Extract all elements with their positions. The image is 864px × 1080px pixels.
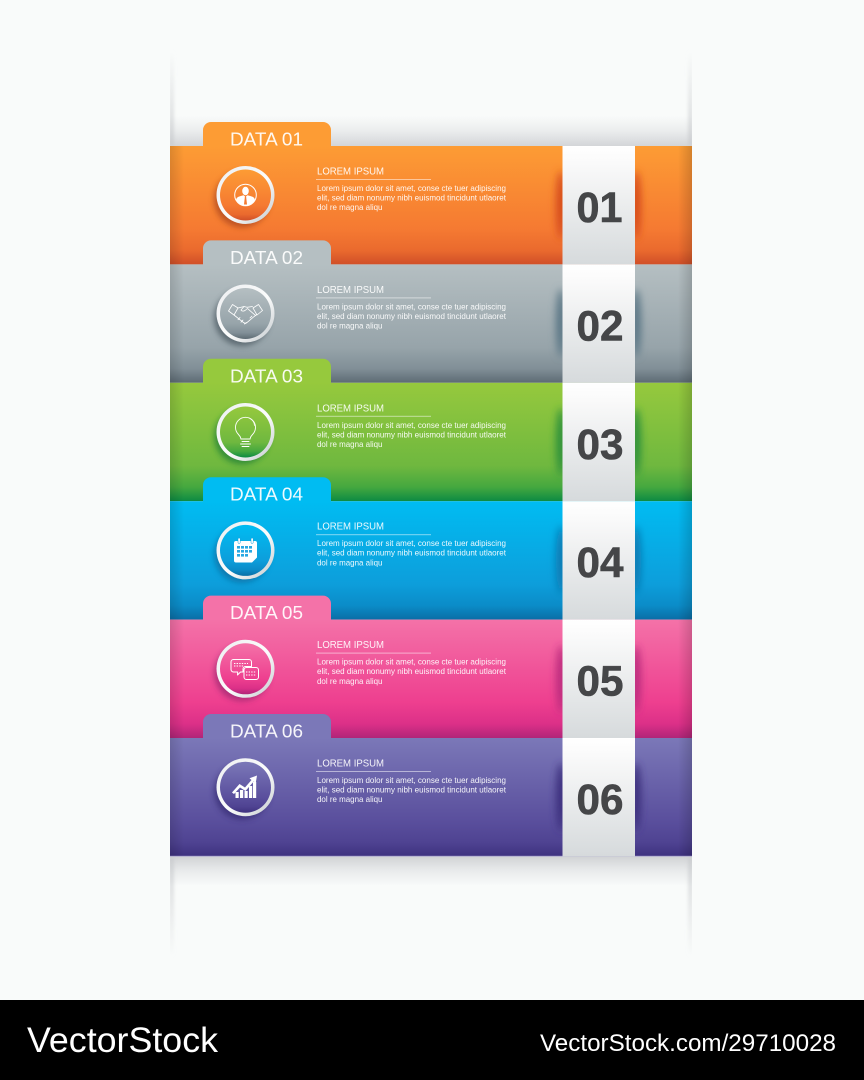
number 01 xyxy=(562,146,635,264)
number 04: 04 xyxy=(576,539,624,587)
strip shadow right xyxy=(631,645,641,713)
text block: lorem ipsum 01: elit, sed diam nonumy nibh euismod tincidunt utlaoret xyxy=(317,192,507,202)
text block: lorem ipsum 04: LOREM IPSUM xyxy=(317,522,384,533)
text block: lorem ipsum 01: Lorem ipsum dolor sit amet, conse cte tuer adipiscing xyxy=(317,183,506,193)
strip shadow right xyxy=(631,289,641,357)
strip shadows xyxy=(556,171,566,239)
number 02: 02 xyxy=(576,302,624,350)
text block: lorem ipsum 02: elit, sed diam nonumy nibh euismod tincidunt utlaoret xyxy=(317,311,507,321)
number 05 xyxy=(562,620,635,738)
strip shadows xyxy=(556,289,566,357)
number 03 xyxy=(562,383,635,501)
number 01: 01 xyxy=(576,184,622,232)
footer bar xyxy=(0,1000,864,1080)
panel: data 05 xyxy=(170,596,692,738)
text block: lorem ipsum 06: dol re magna aliqu xyxy=(317,794,383,804)
icon: light bulb badge xyxy=(214,403,274,464)
panel: data 02 xyxy=(170,240,692,383)
icon: calendar badge xyxy=(214,521,274,583)
number 04 xyxy=(562,501,635,620)
text block: lorem ipsum 01 xyxy=(316,166,507,212)
number 05: 05 xyxy=(576,658,624,706)
tab: data 01 xyxy=(203,122,331,150)
footer image id: VectorStock.com/29710028 xyxy=(540,1030,836,1057)
tab: data 06: DATA 06 xyxy=(230,720,303,742)
text block: lorem ipsum 02: LOREM IPSUM xyxy=(317,285,384,296)
back sheet shadow xyxy=(169,50,693,957)
tab: data 05 xyxy=(203,596,331,623)
tab: data 02: DATA 02 xyxy=(230,247,303,268)
strip shadow right xyxy=(631,408,641,476)
text block: lorem ipsum 05: Lorem ipsum dolor sit amet, conse cte tuer adipiscing xyxy=(317,657,506,667)
text block: lorem ipsum 04: elit, sed diam nonumy nibh euismod tincidunt utlaoret xyxy=(317,548,507,558)
tab: data 03 xyxy=(203,359,331,386)
strip shadows xyxy=(556,408,566,476)
text block: lorem ipsum 02: dol re magna aliqu xyxy=(317,321,383,331)
icon: businessman badge xyxy=(214,166,274,228)
text block: lorem ipsum 04: dol re magna aliqu xyxy=(317,557,383,567)
text block: lorem ipsum 06: Lorem ipsum dolor sit amet, conse cte tuer adipiscing xyxy=(317,775,506,785)
panel: data 01 xyxy=(170,122,692,264)
footer logo: VectorStock xyxy=(27,1021,219,1060)
text block: lorem ipsum 05: elit, sed diam nonumy nibh euismod tincidunt utlaoret xyxy=(317,666,507,676)
number 02 xyxy=(562,264,635,383)
number 03: 03 xyxy=(576,421,624,469)
text block: lorem ipsum 05 xyxy=(316,640,507,686)
panel: data 06 xyxy=(170,714,692,857)
tab: data 01: DATA 01 xyxy=(230,128,303,150)
number 06 xyxy=(562,738,635,856)
tab: data 05: DATA 05 xyxy=(230,602,303,623)
number strip xyxy=(562,146,635,856)
icon: growth chart badge xyxy=(214,758,274,820)
text block: lorem ipsum 01: LOREM IPSUM xyxy=(317,166,384,178)
icon: chat bubbles badge xyxy=(214,640,274,701)
panel: data 04 xyxy=(170,477,692,620)
text block: lorem ipsum 05: LOREM IPSUM xyxy=(317,640,384,651)
tab: data 04 xyxy=(203,477,331,505)
text block: lorem ipsum 01: dol re magna aliqu xyxy=(317,202,383,212)
text block: lorem ipsum 04 xyxy=(316,522,507,567)
text block: lorem ipsum 03: dol re magna aliqu xyxy=(317,439,383,449)
text block: lorem ipsum 04: Lorem ipsum dolor sit amet, conse cte tuer adipiscing xyxy=(317,538,506,548)
text block: lorem ipsum 03: LOREM IPSUM xyxy=(317,403,384,414)
tab: data 06 xyxy=(203,714,331,742)
strip shadows xyxy=(556,526,566,594)
tab: data 04: DATA 04 xyxy=(230,484,303,505)
strip shadow right xyxy=(631,171,641,239)
text block: lorem ipsum 02 xyxy=(316,285,507,331)
strip shadows xyxy=(556,763,566,831)
text block: lorem ipsum 03 xyxy=(316,403,507,449)
text block: lorem ipsum 03: Lorem ipsum dolor sit amet, conse cte tuer adipiscing xyxy=(317,420,506,430)
tab: data 02 xyxy=(203,240,331,268)
strip shadow right xyxy=(631,763,641,831)
text block: lorem ipsum 06 xyxy=(316,758,507,804)
text block: lorem ipsum 03: elit, sed diam nonumy nibh euismod tincidunt utlaoret xyxy=(317,429,507,439)
panel: data 03 xyxy=(170,359,692,501)
strip shadow right xyxy=(631,526,641,594)
tab: data 03: DATA 03 xyxy=(230,365,303,386)
text block: lorem ipsum 06: LOREM IPSUM xyxy=(317,758,384,770)
number 06: 06 xyxy=(576,776,624,824)
strip shadows xyxy=(556,645,566,713)
text block: lorem ipsum 02: Lorem ipsum dolor sit amet, conse cte tuer adipiscing xyxy=(317,301,506,311)
text block: lorem ipsum 06: elit, sed diam nonumy nibh euismod tincidunt utlaoret xyxy=(317,784,507,794)
icon: handshake badge xyxy=(214,284,274,346)
text block: lorem ipsum 05: dol re magna aliqu xyxy=(317,676,383,686)
